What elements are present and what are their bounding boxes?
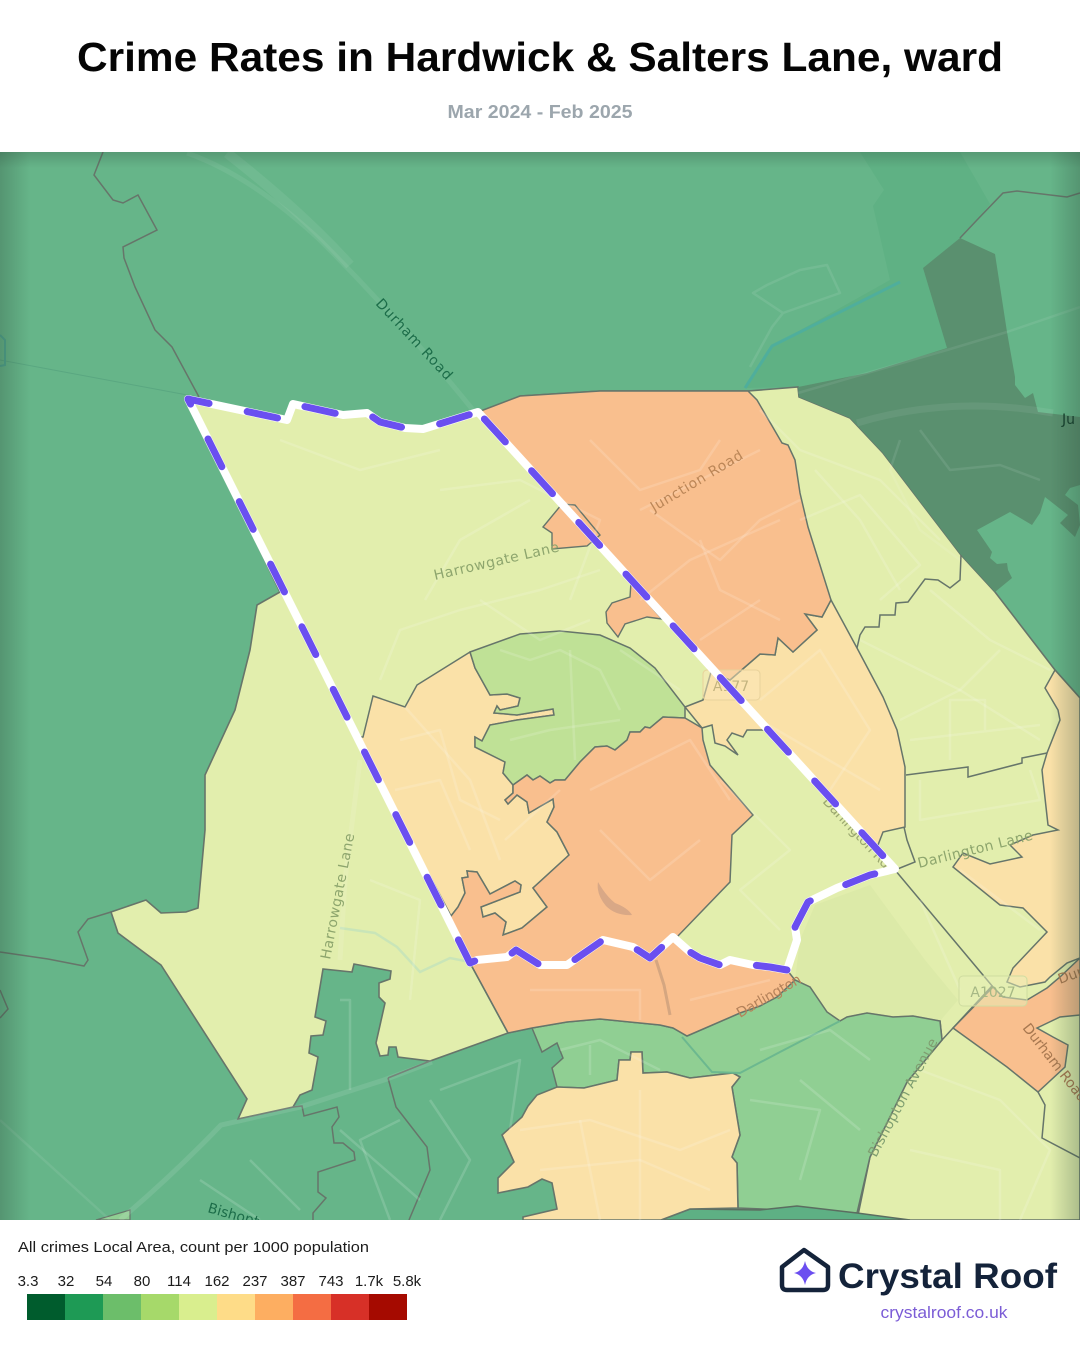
- road label: Darlington lower: Darlington: [734, 972, 804, 1021]
- road label: Bishopton Avenue: Bishopton Avenue: [865, 1036, 942, 1160]
- pond and rail detail: [598, 882, 670, 1015]
- title: Crime Rates in Hardwick & Salters Lane, ward: [77, 34, 1003, 80]
- road badge: A177: [703, 670, 760, 700]
- road label: Harrowgate Lane south: Harrowgate Lane: [318, 832, 358, 961]
- road badge: A1027: A1027: [970, 985, 1016, 1001]
- water courses: [0, 282, 900, 1073]
- road label: Durham Road: Durham Road: [372, 296, 455, 384]
- area: yellow-green low crime areas: [111, 387, 1080, 1220]
- legend: [18, 1239, 422, 1320]
- area: peach south of ward: [470, 937, 795, 1036]
- legend scale values: 237: [242, 1273, 268, 1290]
- road label: Junction Road: Junction Road: [647, 448, 746, 516]
- area: cream south: [498, 1052, 740, 1220]
- map edge vignette: [0, 152, 1080, 1220]
- legend title: All crimes Local Area, count per 1000 population: [18, 1239, 369, 1256]
- legend scale values: 114: [167, 1273, 191, 1290]
- area: dark green north east: [798, 238, 1080, 592]
- area: peach north east of ward: [478, 391, 831, 680]
- area: peach centre: [446, 717, 753, 965]
- legend scale values: 743: [318, 1273, 344, 1290]
- legend scale values: 32: [58, 1273, 74, 1290]
- brand logo: [782, 1250, 1057, 1322]
- area: small peach pockets: [543, 504, 662, 637]
- boundary lines: [0, 152, 1080, 1220]
- legend scale values: 387: [280, 1273, 306, 1290]
- road badge: A1027: [959, 976, 1027, 1006]
- area: dark green strip at bottom: [661, 1206, 910, 1220]
- road label: Darlington Road: Darlington Rd: [819, 794, 894, 872]
- legend scale values: 54: [96, 1273, 112, 1290]
- brand name: Crystal Roof: [838, 1257, 1057, 1296]
- legend scale values: 1.7k: [355, 1273, 384, 1290]
- area: medium green lower south: [532, 980, 942, 1213]
- area: peach east near A1027: [953, 958, 1080, 1092]
- road label: Junction edge: Ju: [1061, 412, 1075, 428]
- road badge: A177: A177: [713, 679, 749, 695]
- road network: [0, 153, 1080, 1220]
- legend scale values: 5.8k: [393, 1273, 422, 1290]
- legend scale values: 3.3: [18, 1273, 38, 1290]
- road label: Bishopton: Bishopton: [206, 1200, 278, 1235]
- road label: Harrowgate Lane: Harrowgate Lane: [432, 540, 561, 584]
- legend colour bar: [27, 1294, 407, 1320]
- ward boundary: dashed purple on white: [188, 399, 895, 970]
- icon: house with star: [782, 1250, 828, 1290]
- legend scale values: 162: [204, 1273, 230, 1290]
- legend scale values: [18, 1273, 422, 1290]
- area: cream east and centre: [685, 600, 905, 845]
- website: crystalroof.co.uk: [880, 1304, 1008, 1322]
- road label: Darlington Lane: Darlington Lane: [916, 828, 1034, 872]
- legend scale values: 80: [134, 1273, 150, 1290]
- area: light green centre: [470, 631, 685, 785]
- subtitle: date range: Mar 2024 - Feb 2025: [448, 101, 632, 122]
